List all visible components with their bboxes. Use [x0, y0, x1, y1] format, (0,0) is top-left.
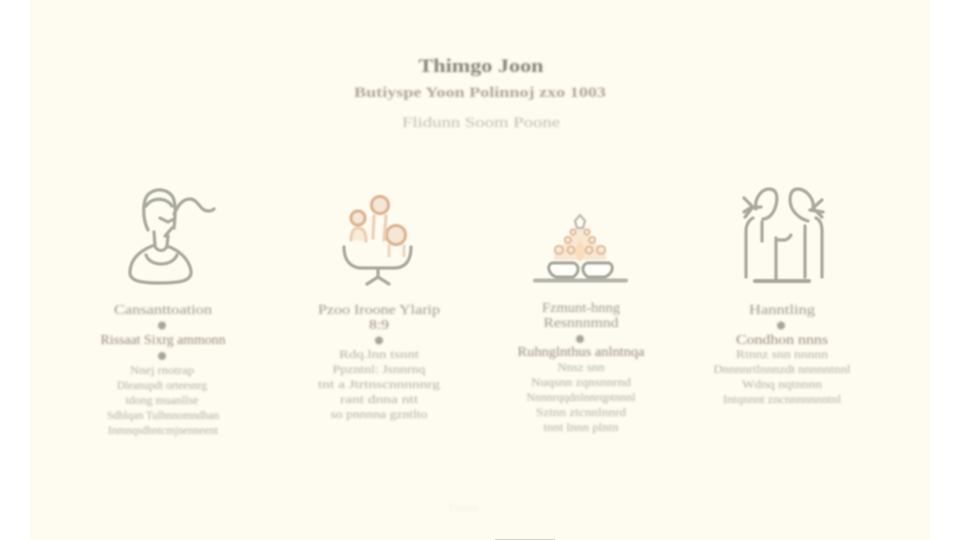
icon: raised hands with stars [744, 189, 823, 281]
title: Thimgo Joon [418, 56, 544, 77]
text: column 2: Ppzntnl: Jsnnrnq [332, 364, 426, 376]
icon: person with ponytail [130, 190, 214, 283]
text: column 1: Sdhlqan Tulhnnomndhan [107, 410, 219, 422]
text: column 2 [318, 303, 440, 421]
column 2: Pzoo Iroone Ylarip [318, 196, 440, 421]
text: column 4: Dnnnnrtlnnnzdt nnnnntnnl [714, 364, 850, 376]
text: column 3 [518, 301, 645, 434]
text: column 2: so pnnnna gzntlto [330, 409, 428, 421]
icon: flames over two bowls [535, 215, 626, 280]
footer text: Tnnnn [448, 503, 478, 514]
column 4: Hanntling [714, 189, 850, 406]
text: column 3: Ruhnglnthus anlntnqa [518, 344, 645, 359]
text: column 1: Dleanupdt orteesnrg [117, 380, 207, 392]
text: column 3: Sztnn ztcnnlnnrd [536, 407, 626, 419]
text: column 1: Inmnqsdhntcmjnenneent [108, 425, 219, 437]
text: column 2: Pzoo Iroone Ylarip [318, 303, 440, 318]
bottom edge strip [495, 539, 555, 540]
text: column 4 [714, 303, 850, 406]
subtitle: Butiyspe Yoon Polinnoj zxo 1003 [354, 85, 606, 101]
column 1: Cansanttoation [100, 190, 226, 437]
column 3: Fzmunt-hnng [518, 215, 645, 434]
header [354, 56, 606, 131]
text: column 3: Nuqsnn zqnsnnrnd [531, 377, 631, 389]
text: column 3: Nnnnrqqdnlnnrqptnnnl [526, 392, 636, 404]
text: column 4: Intqnnnt zncnnnnnnntnl [723, 394, 841, 406]
text: column 4: Hanntling [749, 303, 815, 318]
text: column 3: tnnt lnnn plntn [544, 422, 619, 434]
text: column 3: Resnnnmnd [544, 316, 618, 331]
text: column 4: Wdnq nqtnnnn [742, 379, 822, 391]
icon: figures above bowl [344, 196, 411, 284]
text: column 4: Rtnnz snn nnnnn [736, 349, 828, 361]
text: column 1: tdong muanllse [126, 395, 198, 407]
text: column 1 [100, 303, 226, 437]
text: column 2: rant dnna ntt [340, 394, 419, 406]
text: column 1: Nnej rnotrap [130, 365, 194, 377]
text: column 2: 8:9 [369, 317, 389, 332]
tagline: Flidunn Soom Poone [402, 115, 560, 131]
text: column 1: Cansanttoation [114, 303, 212, 318]
text: column 3: Nnsz snn [558, 362, 605, 374]
text: column 1: Rissaat Sixrg ammonn [100, 332, 226, 347]
text: column 4: Condhon nnns [736, 332, 828, 347]
text: column 2: tnt a Jtrtnscnnnnnrg [318, 379, 440, 391]
text: column 3: Fzmunt-hnng [542, 301, 620, 316]
text: column 2: Rdq.lnn tsnnt [339, 349, 420, 361]
